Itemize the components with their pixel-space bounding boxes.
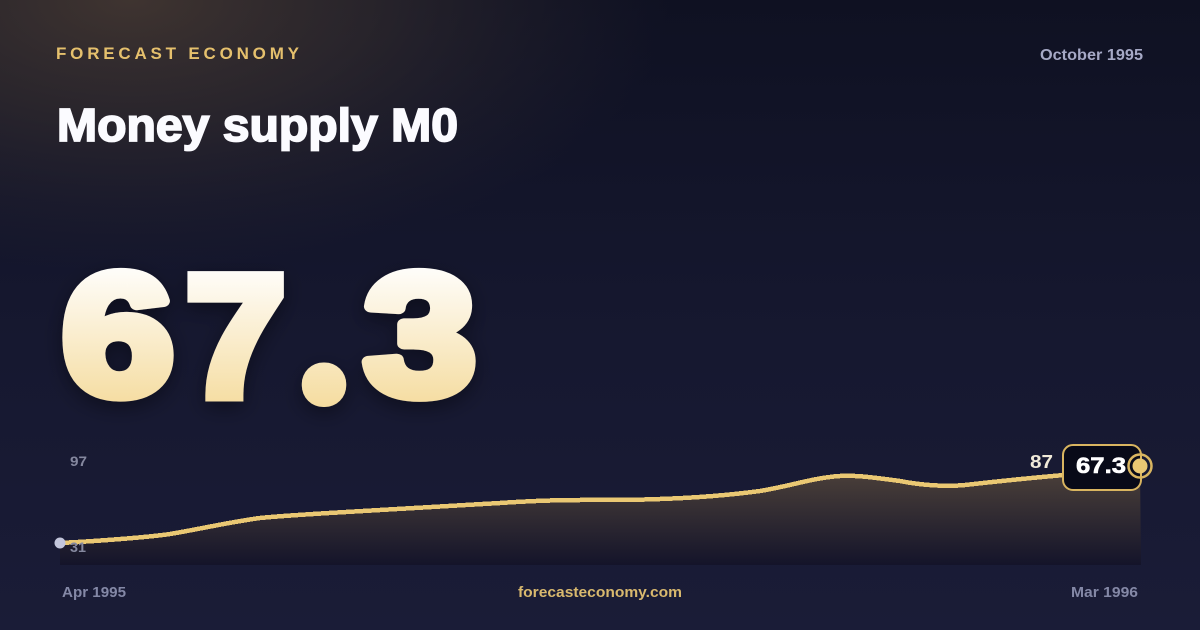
big value: [62, 239, 476, 433]
end marker: [1128, 454, 1152, 478]
area fill: [60, 467, 1141, 565]
axis min: 31: [70, 539, 86, 555]
big value: .: [323, 378, 326, 389]
start point: [54, 538, 66, 548]
peak label: 87: [1030, 452, 1053, 472]
axis max: 97: [70, 453, 87, 469]
trend line: [60, 475, 1064, 543]
title: Money supply M0: [57, 99, 458, 151]
brand label: FORECAST ECONOMY: [56, 44, 300, 63]
date: October 1995: [1040, 47, 1143, 64]
big value: 6: [62, 239, 174, 431]
big value: 3: [364, 239, 476, 431]
value callout: [1063, 445, 1141, 490]
website: forecasteconomy.com: [518, 584, 682, 601]
big value: 7: [186, 241, 285, 433]
value callout: 67.3: [1076, 453, 1126, 478]
end month: Mar 1996: [1071, 584, 1138, 601]
start month: Apr 1995: [62, 584, 126, 601]
area chart: [54, 445, 1152, 565]
